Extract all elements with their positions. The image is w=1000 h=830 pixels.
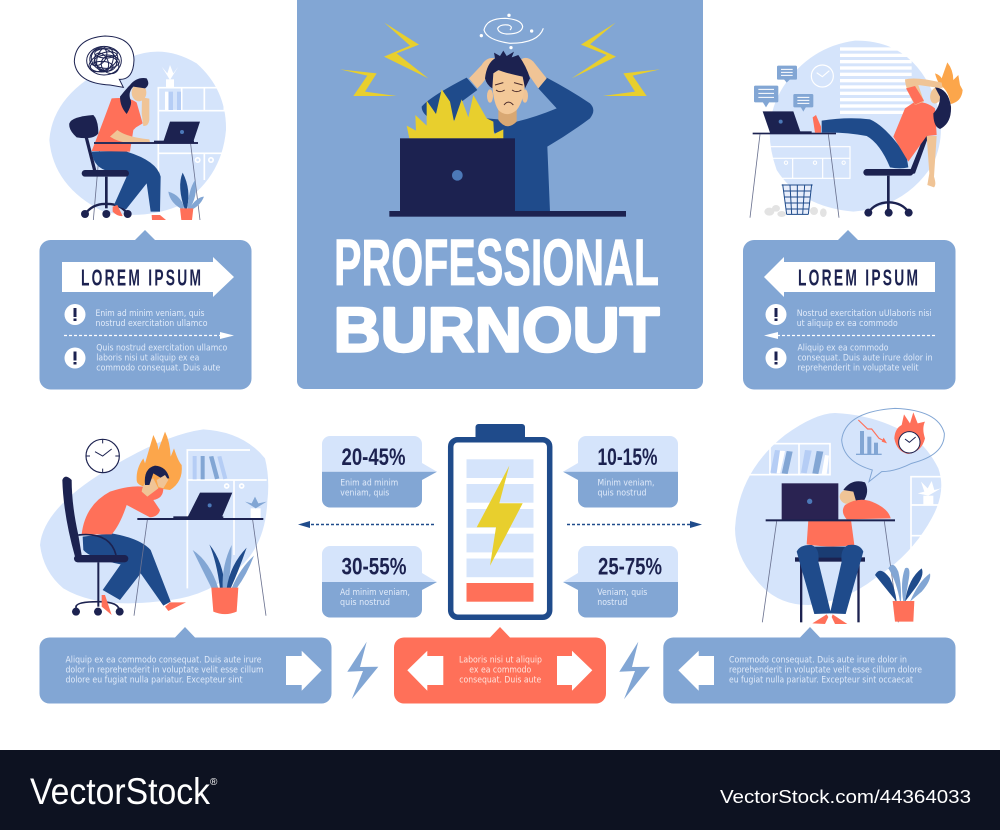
alert icon: [64, 304, 86, 325]
chair seat and armrest: [74, 535, 128, 562]
flames over laptop: [407, 89, 503, 138]
right arrow: [557, 651, 592, 691]
text block: [66, 656, 264, 686]
callout: 10-15%: 10-15%: [598, 444, 658, 471]
wall clock: [86, 439, 119, 473]
text block: [96, 344, 228, 374]
text block: [459, 656, 542, 686]
laptop: [400, 138, 515, 212]
thought bubble: [842, 408, 944, 482]
text block: [798, 344, 932, 374]
dashed arrow: [64, 332, 234, 339]
chair back and base: [69, 115, 132, 218]
desk: [389, 211, 626, 217]
text block: nostrud exercitation ullamco: [96, 319, 208, 329]
callout: 25-75%: Veniam, quis: [597, 588, 648, 598]
text block: [729, 656, 922, 686]
alert icon: [64, 348, 86, 368]
callout: 25-75%: 25-75%: [598, 554, 662, 580]
shelf plant: [245, 497, 267, 518]
text block: Enim ad minim veniam, quis: [96, 309, 205, 319]
battery: [451, 424, 550, 617]
flame: [935, 62, 963, 104]
battery bolt: [477, 466, 523, 566]
registered mark: ®: [210, 777, 218, 788]
banner text: LOREM IPSUM: [798, 266, 918, 292]
text block: laboris nisi ut aliquip ex ea: [96, 354, 199, 364]
footer logo: VectorStock: [30, 771, 210, 812]
chair: [863, 133, 928, 217]
chair back and base: [62, 477, 124, 616]
text block: Commodo consequat. Duis aute irure dolor in: [729, 656, 907, 666]
text block: Laboris nisi ut aliquip: [459, 656, 542, 666]
alert icon: [766, 348, 786, 368]
icon: lightning right: [619, 642, 650, 699]
potted plant: [193, 544, 254, 614]
text block: dolor in reprehenderit in voluptate velit esse cillum: [66, 666, 264, 676]
chair seat: [82, 170, 129, 177]
banner arrow: [62, 257, 234, 297]
illustration: exhausted woman with feet on desk: [750, 41, 963, 218]
banner arrow: [764, 257, 935, 297]
man: [797, 481, 891, 624]
dizzy spiral: [480, 14, 543, 49]
flame: [137, 432, 182, 490]
arrow: [286, 651, 322, 691]
text block: consequat. Duis aute irure dolor in: [798, 354, 932, 364]
text block: [797, 309, 932, 329]
callout: 30-55%: quis nostrud: [340, 598, 390, 608]
battery cap: [476, 424, 525, 444]
thought bubble: [74, 36, 134, 87]
text block: eu fugiat nulla pariatur. Excepteur sint occaecat: [729, 676, 913, 686]
panel: central title: [297, 0, 703, 389]
callout: 25-75%: nostrud: [597, 598, 627, 608]
panel: left info: [40, 230, 252, 390]
dashed arrow: [764, 332, 935, 339]
charge bars: [466, 459, 534, 602]
text block: dolore eu fugiat nulla pariatur. Excepteur sint: [66, 676, 243, 686]
woman: [92, 78, 166, 220]
callout: 20-45%: Enim ad minim: [340, 478, 398, 488]
text block: Quis nostrud exercitation ullamco: [96, 344, 228, 354]
heading: professional: PROFESSIONAL: [334, 225, 659, 299]
callout: 20-45%: [322, 436, 437, 508]
desk and laptop: [134, 493, 266, 616]
alert icon: [766, 304, 786, 325]
burning clock: [894, 412, 925, 454]
callout: 20-45%: veniam, quis: [340, 488, 390, 498]
plant: [168, 173, 204, 220]
text block: Aliquip ex ea commodo: [798, 344, 889, 354]
man: [82, 466, 186, 615]
illustration: stressed woman at desk: [49, 36, 226, 220]
callout: 10-15%: Minim veniam,: [598, 478, 654, 488]
text block: [96, 309, 208, 329]
woman: [813, 79, 951, 187]
heading: burnout: BURNOUT: [334, 296, 660, 366]
arrow: dotted left: [298, 521, 434, 528]
shelf plant: [918, 481, 941, 505]
text block: Nostrud exercitation uUlaboris nisi: [797, 309, 932, 319]
battery body: [451, 440, 550, 617]
panel: bottom left: [40, 627, 332, 704]
callout: 30-55%: [322, 546, 437, 618]
text block: commodo consequat. Duis aute: [96, 364, 221, 374]
callout: 30-55%: Ad minim veniam,: [340, 588, 410, 598]
text block: ut aliquip ex ea commodo: [797, 319, 898, 329]
man body: [422, 51, 593, 212]
callout: 10-15%: [563, 436, 678, 508]
panel: bottom centre: [394, 627, 606, 704]
books: [770, 450, 829, 474]
text block: reprehenderit in voluptate velit: [798, 364, 919, 374]
callout: 10-15%: quis nostrud: [598, 488, 646, 498]
desk and laptop: [94, 122, 200, 144]
panel: bottom right: [663, 627, 956, 704]
chair: [795, 557, 865, 622]
illustration: man with head on fire bent over desk: [40, 429, 268, 616]
desk and laptop: [750, 111, 839, 218]
callout: 20-45%: 20-45%: [342, 444, 406, 471]
callout: 30-55%: 30-55%: [342, 554, 406, 580]
illustration: man asleep on desk: [735, 408, 944, 624]
text block: Aliquip ex ea commodo consequat. Duis aute irure: [66, 656, 262, 666]
chat bubbles: [754, 66, 813, 112]
waste basket and papers: [764, 184, 827, 217]
arrow: [678, 651, 714, 691]
text block: consequat. Duis aute: [459, 676, 542, 686]
panel: right info: [743, 230, 956, 390]
desk and laptop: [766, 483, 895, 521]
text block: reprehenderit in voluptate velit esse cillum dolore: [729, 666, 922, 676]
desk legs: [762, 521, 898, 622]
footer url: VectorStock.com/44364033: [720, 786, 971, 807]
potted plant: [875, 565, 930, 622]
books: [193, 456, 227, 479]
icon: lightning left: [347, 642, 378, 699]
left arrow: [407, 651, 443, 691]
lightning bolts: [340, 23, 660, 96]
callout: 25-75%: [563, 546, 678, 618]
text block: ex ea commodo: [469, 666, 532, 676]
arrow: dotted right: [567, 521, 702, 528]
illustration: burned out man at laptop: [340, 14, 660, 217]
banner text: LOREM IPSUM: [81, 266, 201, 292]
falling chart: [856, 431, 882, 455]
footer bar: [0, 750, 1000, 830]
